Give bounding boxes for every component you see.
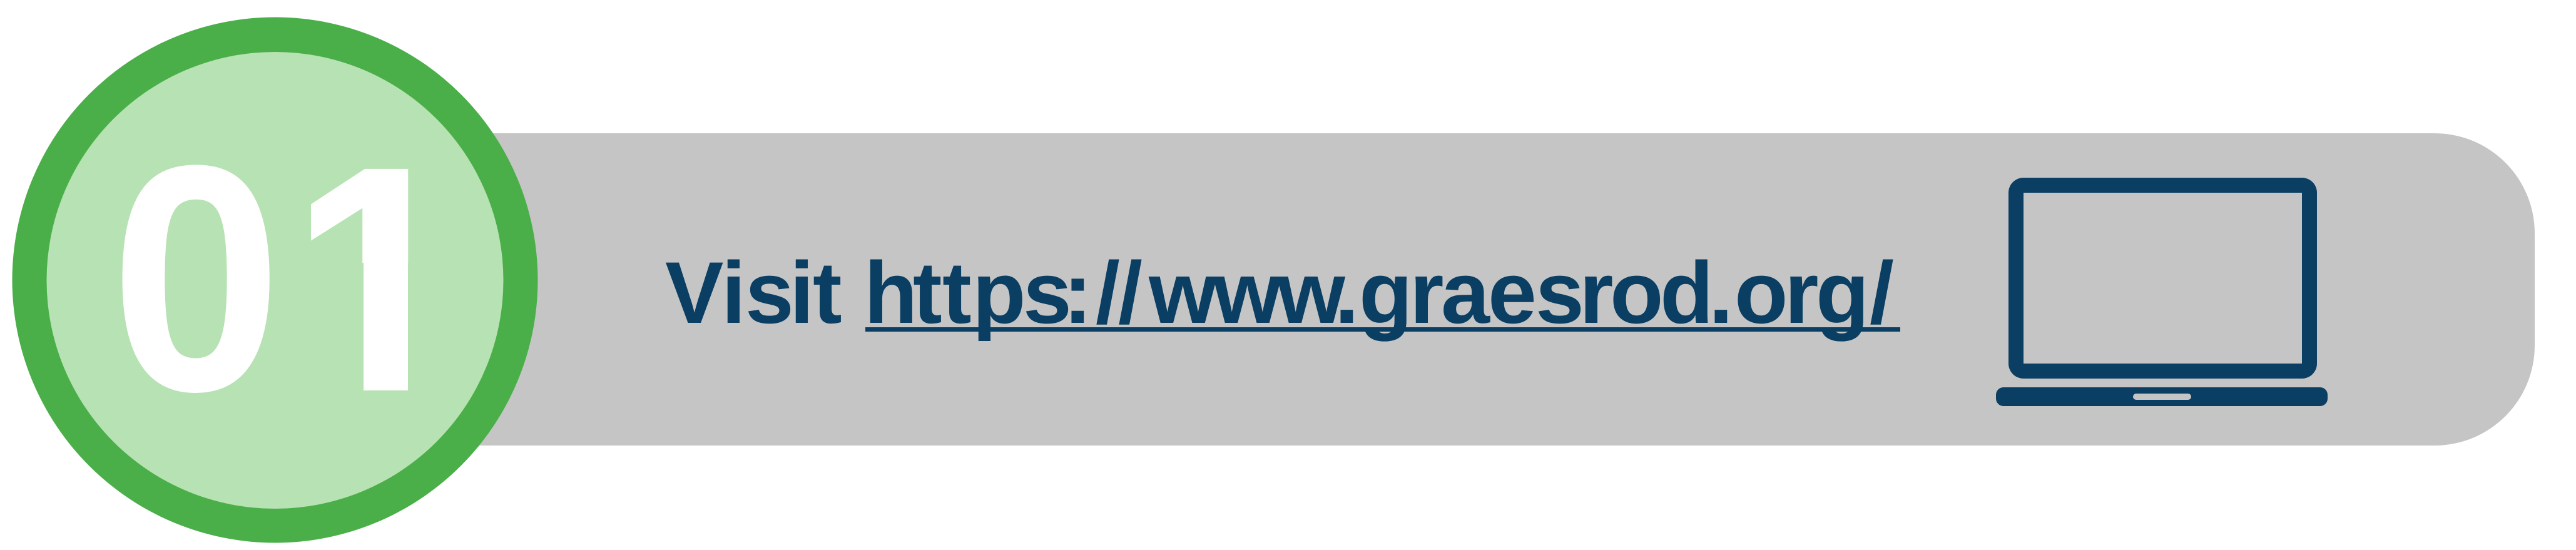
instruction text with link: [665, 243, 1900, 342]
step number 01: [123, 165, 408, 393]
panel: gray rounded bar: [313, 133, 2535, 446]
step number badge: [13, 18, 538, 543]
link underline: [865, 327, 1900, 332]
badge outer green ring: [13, 18, 538, 543]
laptop base with slot: [1996, 387, 2328, 406]
badge inner light green disc: [46, 52, 503, 509]
link: graesrod url: https://www.graesrod.org/: [864, 243, 1894, 342]
step number 01: 1: [285, 96, 470, 472]
word: Visit: Visit: [665, 243, 842, 342]
step number 01: 0: [110, 99, 282, 459]
icon: laptop: [1996, 178, 2328, 406]
laptop screen: [2008, 178, 2317, 379]
